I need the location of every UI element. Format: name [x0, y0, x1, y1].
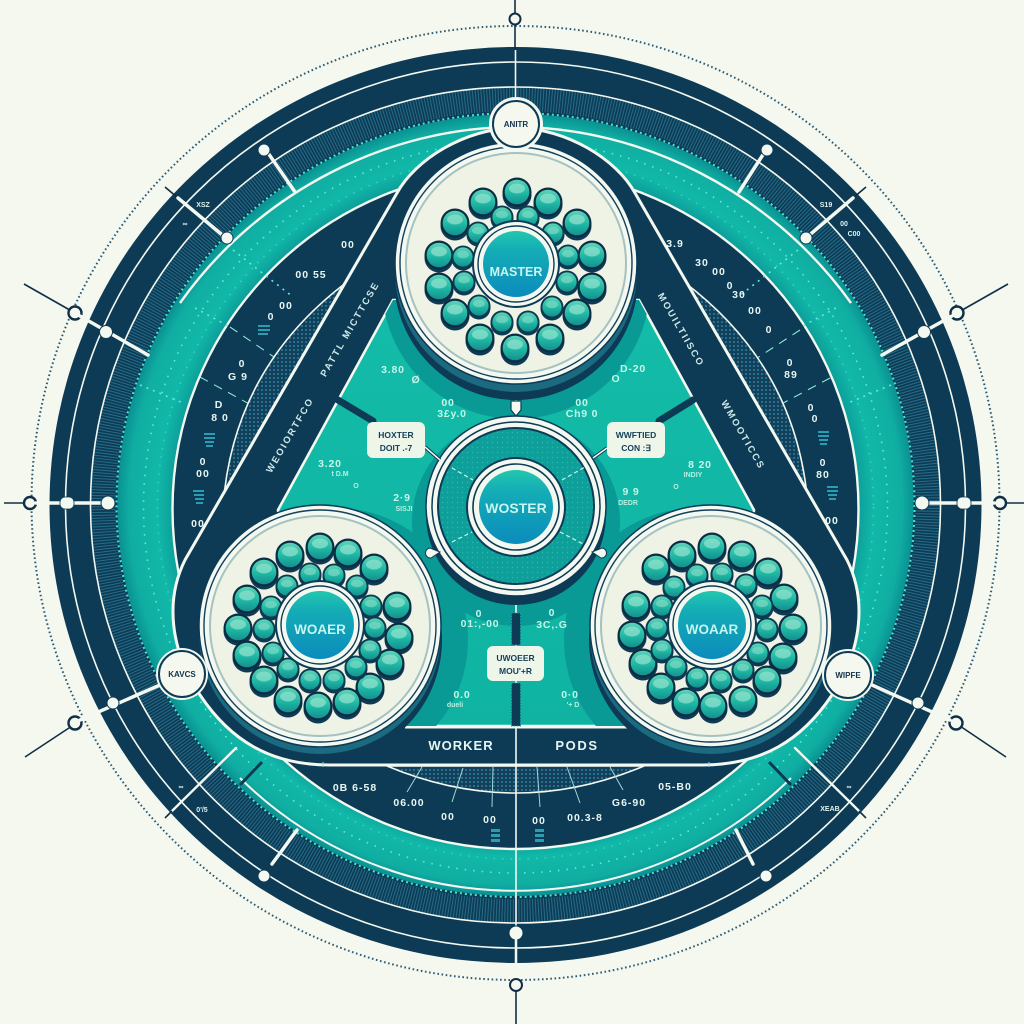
bottom numbers: 00.3-8	[567, 812, 603, 824]
left numbers: 0	[200, 456, 206, 468]
spine hatched lower	[512, 683, 520, 726]
frame ticks under discs	[323, 738, 709, 767]
triangle readings: '+ D	[567, 702, 579, 709]
junction: top: ANITR	[504, 120, 528, 129]
triangle readings: 2·9	[393, 492, 411, 504]
upper right short pin	[800, 187, 866, 244]
triangle readings: O	[673, 484, 679, 491]
teal shadows	[356, 300, 675, 726]
bottom numbers: G6-90	[612, 797, 646, 809]
caption bar line	[405, 726, 627, 728]
bottom numbers	[178, 781, 852, 827]
left numbers: 00	[341, 239, 355, 251]
disc face	[210, 516, 430, 736]
right numbers: 00	[748, 305, 762, 317]
pod cluster	[618, 532, 808, 724]
disc base	[198, 518, 442, 762]
triangle readings: 3£y.0	[437, 408, 467, 420]
bottom pin	[509, 926, 523, 1024]
band label right lower: WMOOTICCS	[718, 399, 767, 472]
dark separators lower	[240, 762, 791, 785]
triangle readings: dueli	[447, 702, 463, 709]
bottom numbers: 06.00	[393, 797, 425, 809]
panel: right data readings	[666, 202, 861, 527]
hatched ring	[104, 99, 928, 911]
left numbers: 00	[196, 468, 210, 480]
lower right long pin	[872, 685, 1006, 757]
spine line	[515, 373, 517, 930]
bottom numbers: XEAB	[820, 806, 840, 813]
left numbers: 8 0	[211, 412, 229, 424]
right numbers: 80	[816, 469, 830, 481]
right numbers: 0	[812, 413, 818, 425]
left numbers: G 9	[228, 371, 248, 383]
pod cluster	[424, 178, 606, 366]
right numbers: S19	[820, 202, 832, 209]
left numbers: 00 55	[295, 269, 327, 281]
right numbers: 0	[787, 357, 793, 369]
disc rim	[395, 142, 637, 384]
callout: right	[607, 422, 665, 458]
disc inner line	[595, 510, 827, 742]
disc side ring	[590, 512, 832, 754]
triangle readings: 0.0	[454, 689, 470, 701]
band label right upper: MOUILTIISCO	[655, 291, 706, 369]
disc base	[394, 156, 638, 400]
callout: left: HOXTER	[378, 430, 414, 440]
triangle readings: SISJI	[395, 506, 413, 513]
disc base	[589, 518, 833, 762]
caption: pods: PODS	[555, 738, 599, 753]
teal fill	[278, 300, 754, 726]
triangle readings: 00	[441, 397, 455, 409]
bottom numbers: 0'/5	[196, 807, 208, 814]
callout: right: WWFTIED	[616, 430, 656, 440]
triangle readings: 00	[575, 397, 589, 409]
central dotted field	[438, 428, 594, 584]
rotated band labels	[264, 280, 767, 475]
hatched lens right	[684, 282, 815, 507]
callout: bottom: UWOEER	[496, 653, 535, 663]
spine hatched upper	[512, 613, 520, 645]
triangle readings: 3C,.G	[536, 619, 568, 631]
disc rim	[199, 505, 441, 747]
triangle readings: 3.80	[381, 364, 405, 376]
triangle readings	[318, 363, 712, 709]
bottom numbers: 00	[441, 811, 455, 823]
guide left b	[200, 377, 273, 417]
callout: right: CON :∃	[621, 443, 651, 453]
band label left lower: WEOIORTFCO	[264, 395, 317, 475]
triangle readings: 3.20	[318, 458, 342, 470]
dotted guide teal right	[738, 250, 891, 403]
guide right b	[757, 378, 830, 417]
disc side ring	[395, 150, 637, 392]
right numbers: 3.9	[666, 238, 684, 250]
triangle readings: 0·0	[561, 689, 579, 701]
triangle readings: 9 9	[622, 486, 640, 498]
lower left diagonal	[165, 748, 236, 818]
top pin	[510, 0, 520, 100]
left numbers: ∞	[182, 221, 188, 228]
central connectors	[452, 467, 585, 545]
central outer rim	[426, 416, 606, 596]
connector knobs at central node	[425, 548, 607, 558]
right pin	[915, 496, 1024, 510]
panel: central node	[426, 416, 606, 605]
triangle readings: DEDR	[618, 500, 638, 507]
callout: bottom	[487, 646, 544, 681]
lower right tab	[736, 830, 772, 882]
disc inner line	[400, 147, 632, 379]
worker badge	[276, 581, 364, 669]
top left tab	[258, 144, 295, 192]
arrow tip	[511, 401, 521, 416]
teal band	[118, 114, 914, 896]
hatched leader right	[659, 400, 693, 421]
upper left short pin	[165, 187, 233, 244]
bottom numbers: ∞	[846, 784, 852, 791]
callout connector lines	[425, 447, 607, 460]
triangle readings: 0	[476, 608, 482, 620]
right numbers: 30	[732, 289, 746, 301]
lower left long pin	[25, 685, 160, 757]
junction: right: WIPFE	[835, 671, 861, 680]
lens ticks	[407, 767, 623, 807]
right numbers: 0	[808, 402, 814, 414]
right numbers: 0	[820, 457, 826, 469]
bright dotted track	[116, 113, 914, 897]
left numbers	[182, 202, 355, 530]
right numbers: 89	[784, 369, 798, 381]
hatched lens left	[216, 282, 347, 507]
upper right pin	[882, 284, 1008, 355]
guide right a	[693, 330, 800, 400]
ring line outer	[66, 62, 966, 948]
junction: left	[156, 648, 208, 700]
dotted guide teal left	[140, 250, 293, 403]
central base shadow	[426, 425, 606, 605]
triangle readings: 8 20	[688, 459, 712, 471]
master badge	[473, 221, 559, 307]
left numbers: 0	[268, 311, 274, 323]
master badge: MASTER	[490, 265, 542, 279]
callout: left: DOIT .-7	[380, 443, 413, 453]
mid dotted track	[144, 141, 888, 873]
triangle readings: D-20	[620, 363, 646, 375]
mid dotted track inner	[158, 155, 874, 859]
junction: top	[490, 98, 542, 150]
band label left upper: PATTL MICTTCSE	[319, 280, 382, 379]
bottom mini bars	[491, 829, 544, 842]
triangle readings: Ø	[412, 374, 420, 386]
bottom numbers: 00	[532, 815, 546, 827]
lower right diagonal	[795, 748, 866, 818]
pod cluster	[224, 532, 414, 724]
disc side ring	[199, 512, 441, 754]
worker badge: WOAER	[294, 622, 346, 637]
top right tab	[739, 144, 773, 192]
central rim line	[432, 422, 600, 590]
left numbers: 00	[191, 518, 205, 530]
junction: right	[822, 649, 874, 701]
vertical spine	[511, 373, 521, 930]
ring line middle	[90, 87, 940, 923]
left numbers: 00	[279, 300, 293, 312]
left numbers: 0	[239, 358, 245, 370]
disc face	[406, 153, 626, 373]
triangle readings: t D.M	[331, 471, 349, 478]
triangle readings: O	[612, 373, 620, 385]
bottom numbers: 0B 6-58	[333, 782, 377, 794]
hatched lens bottom	[387, 766, 644, 793]
callout: bottom: MOU'+R	[499, 666, 532, 676]
junction: left: KAVCS	[168, 670, 196, 679]
right numbers: 00	[825, 515, 839, 527]
triangle readings: O	[353, 483, 359, 490]
central badge: WOSTER	[485, 500, 547, 516]
triangle readings: Ch9 0	[566, 408, 598, 420]
inner navy field	[172, 169, 858, 849]
caption: worker: WORKER	[428, 738, 494, 753]
left numbers: XSZ	[196, 202, 211, 209]
callout: left	[367, 422, 425, 458]
right mini bars	[818, 431, 838, 500]
left numbers: D	[215, 399, 223, 411]
bottom numbers: ∞	[178, 784, 184, 791]
worker badge	[668, 581, 756, 669]
right numbers: C00	[848, 231, 861, 238]
callout connector highlights	[425, 447, 607, 460]
panel: right worker node	[589, 505, 833, 762]
disc face	[601, 516, 821, 736]
central badge	[467, 458, 565, 556]
panel: rounded triangle frame	[173, 128, 859, 765]
panel: left worker node	[198, 505, 442, 762]
disc rim	[590, 505, 832, 747]
hatched leader left	[338, 400, 373, 421]
panel: bottom data readings	[178, 781, 852, 842]
upper left pin	[24, 284, 148, 355]
triangle readings: INDIY	[684, 472, 703, 479]
left mini bars	[193, 325, 270, 504]
right numbers: 0	[727, 280, 733, 292]
right numbers: 00	[712, 266, 726, 278]
dashed radial guides	[140, 250, 891, 417]
bottom numbers: 05-B0	[658, 781, 692, 793]
worker badge: WOAAR	[686, 622, 738, 637]
panel: master node	[394, 142, 638, 400]
right numbers: 30	[695, 257, 709, 269]
guide left a	[230, 327, 337, 400]
left pin	[4, 496, 115, 510]
right numbers	[666, 202, 861, 527]
right numbers: 00	[840, 221, 848, 228]
upper partial band line	[180, 127, 851, 303]
triangle readings: 0	[549, 607, 555, 619]
right numbers: 0	[766, 324, 772, 336]
triangle readings: 01:,-00	[461, 618, 499, 630]
lower left tab	[258, 830, 297, 882]
bottom numbers: 00	[483, 814, 497, 826]
disc inner line	[204, 510, 436, 742]
panel: teal triangle	[276, 298, 756, 726]
panel: left data readings	[182, 202, 355, 530]
lower partial band line	[240, 778, 791, 891]
